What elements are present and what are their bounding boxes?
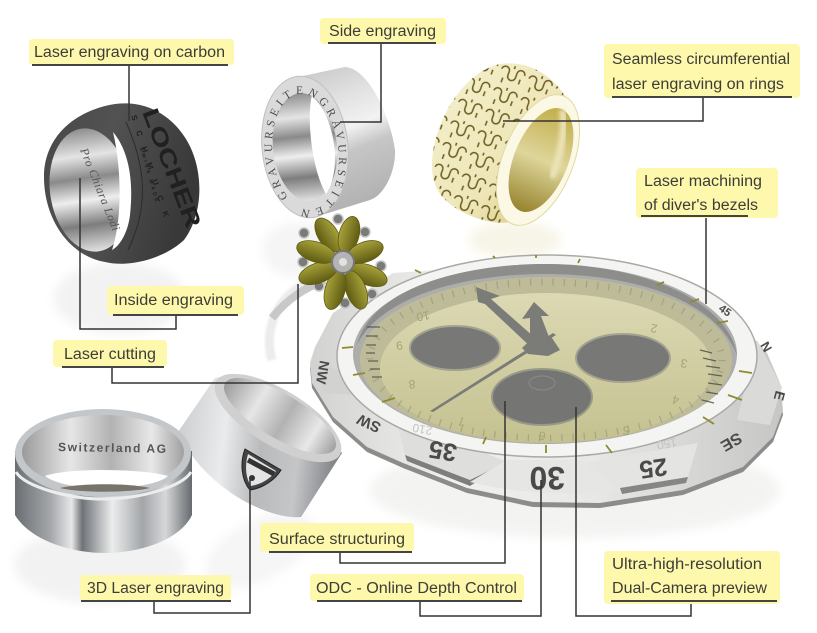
dial numerals: 3	[679, 356, 689, 371]
dial numerals: 150	[655, 435, 678, 452]
bezel numerals: SW	[354, 410, 384, 436]
dial numerals: 210	[411, 421, 434, 438]
dial numerals	[395, 308, 689, 452]
dial numerals: 8	[408, 377, 416, 392]
bezel numerals: NW	[313, 359, 333, 386]
callout: laser machining of diver's bezels: of diver's bezels	[644, 197, 758, 214]
dial numerals: 10	[415, 308, 431, 324]
callout: seamless circumferential engraving	[604, 44, 800, 98]
icon: carbon ring: LOCHER	[137, 104, 207, 232]
dial numerals: 7	[458, 414, 465, 428]
leader: side engraving	[340, 44, 381, 122]
callout: ODC online depth control: ODC - Online Depth Control	[316, 580, 517, 597]
icon: carbon ring: SCHMUCK	[129, 114, 174, 229]
bezel tabs	[313, 340, 782, 494]
callout: 3D laser engraving: 3D Laser engraving	[87, 580, 224, 597]
leader: surface structuring	[340, 401, 505, 563]
chapter ring ticks	[370, 282, 722, 438]
bezel numerals: 45	[716, 303, 733, 319]
icon: gold ring	[432, 63, 580, 226]
subdials	[410, 326, 670, 425]
callout: side engraving: Side engraving	[329, 23, 436, 40]
dial numerals: 9	[395, 338, 404, 353]
callout: inside engraving: Inside engraving	[114, 292, 233, 309]
bezel numerals: N	[757, 339, 775, 355]
icon: gem flower ring	[272, 214, 390, 318]
callout: laser machining of diver's bezels	[636, 168, 778, 218]
bezel numerals: SE	[717, 429, 744, 454]
callout: ultra-high-resolution dual-camera preview	[604, 551, 780, 604]
callout: laser engraving on carbon	[29, 39, 234, 65]
dial numerals: 5	[621, 423, 631, 438]
icon: side engraving ring	[261, 67, 395, 218]
callout: inside engraving	[107, 286, 244, 315]
dial numerals: 2	[649, 321, 659, 336]
bezel numerals: 25	[638, 452, 669, 484]
callout: 3D laser engraving	[80, 575, 231, 601]
watch hands	[430, 287, 560, 412]
callout: side engraving	[320, 18, 446, 44]
icon: carbon ring: Pro Chiara Lodi	[77, 145, 123, 233]
callout: ultra-high-resolution dual-camera preview: Ultra-high-resolution	[612, 556, 762, 573]
reflections under objects	[14, 222, 780, 605]
icon: left flat ring	[15, 409, 192, 553]
callout: surface structuring: Surface structuring	[269, 531, 405, 548]
icon: carbon ring	[42, 103, 207, 264]
icon: left flat ring: Switzerland AG	[58, 440, 166, 456]
callout: surface structuring	[260, 523, 414, 552]
leader: inside engraving	[80, 178, 176, 329]
callout: ODC online depth control	[310, 574, 524, 601]
callout: laser engraving on carbon: Laser engraving on carbon	[34, 44, 225, 61]
leader: laser engraving on carbon	[128, 65, 130, 121]
bezel numerals: 35	[427, 434, 459, 467]
leader: seamless engraving	[503, 97, 703, 121]
bezel ticks	[342, 255, 752, 453]
icon: shield engraving	[242, 449, 281, 490]
leader: 3D laser engraving	[154, 478, 250, 613]
leader: diver's bezels	[705, 216, 707, 304]
bezel numerals: E	[771, 389, 789, 402]
bezel numerals: 30	[529, 460, 565, 496]
callout: seamless circumferential engraving: laser engraving on rings	[612, 76, 784, 93]
dark minute ticks	[366, 327, 722, 403]
callout: laser cutting	[53, 340, 167, 367]
bezel numerals	[313, 303, 789, 496]
leader: ODC	[420, 480, 541, 616]
callout: seamless circumferential engraving: Seamless circumferential	[612, 51, 790, 68]
callout: laser cutting: Laser cutting	[64, 346, 156, 363]
leader: dual camera	[576, 407, 691, 616]
dial numerals: 4	[670, 392, 681, 408]
callout: laser machining of diver's bezels: Laser machining	[644, 173, 762, 190]
icon: side engraving ring: GRAVURSEITENGRAVURSEITEN	[264, 86, 346, 218]
callout: ultra-high-resolution dual-camera preview: Dual-Camera preview	[612, 580, 768, 597]
icon: diver's watch bezel	[310, 255, 789, 508]
dial numerals: 6	[538, 428, 546, 443]
icon: right flat ring with shield	[178, 357, 354, 517]
leader: laser cutting	[112, 284, 298, 383]
icon: carbon ring: SWISS MADE	[138, 147, 159, 203]
